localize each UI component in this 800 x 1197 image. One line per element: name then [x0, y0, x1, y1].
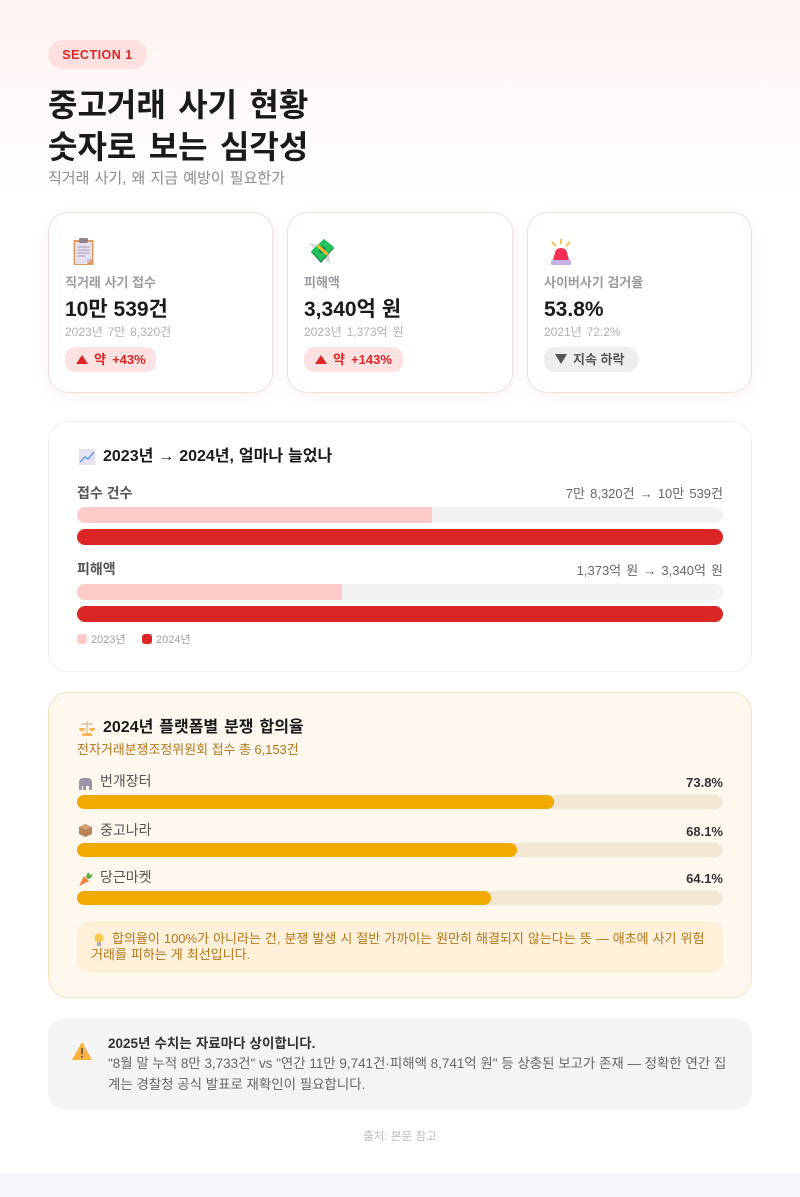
icon: carrot [79, 872, 93, 886]
warning body: "8월 말 누적 8만 3,733건" vs "연간 11만 9,741건·피해액 8,741억 원" 등 상충된 보고가 존재 — 정확한 연간 집 [108, 1056, 726, 1071]
bar: bungaejangteo [77, 795, 723, 809]
warning body: 계는 경찰청 공식 발표로 재확인이 필요합니다. [108, 1077, 365, 1092]
bar: reports 2023 [77, 507, 723, 523]
change pill [304, 347, 403, 372]
title: 중고거래 사기 현황 [48, 87, 308, 123]
platform label: 중고나라 [100, 822, 152, 838]
platform value: 64.1% [686, 871, 723, 886]
row values: damages: 1,373억 원 → 3,340억 원 [577, 563, 723, 578]
value: 3,340억 원 [304, 298, 401, 321]
previous year: 2023년 7만 8,320건 [65, 325, 171, 339]
icon: light bulb [94, 934, 104, 946]
note text: 거래를 피하는 게 최선입니다. [91, 947, 250, 962]
bar: damages 2024 [77, 606, 723, 622]
icon: warning [72, 1042, 92, 1060]
row label: damages: 피해액 [77, 561, 116, 577]
row label: reports: 접수 건수 [77, 485, 132, 501]
bar: damages 2023 [77, 584, 723, 600]
callout: settlement note [77, 921, 723, 973]
warning body [108, 1056, 726, 1092]
note text: 합의율이 100%가 아니라는 건, 분쟁 발생 시 절반 가까이는 원만히 해결되지 않는다는 뜻 — 애초에 사기 위험 [112, 931, 704, 946]
legend [77, 634, 191, 646]
trend pill [544, 347, 638, 372]
trend pill: 지속 하락 [573, 352, 624, 367]
panel: card reports [48, 212, 273, 393]
section badge [48, 40, 147, 69]
platform label: 당근마켓 [100, 869, 152, 885]
legend text 2023: 2023년 [91, 634, 126, 646]
icon: clipboard [74, 238, 94, 265]
value: 10만 539건 [65, 298, 168, 321]
subheading: 전자거래분쟁조정위원회 접수 총 6,153건 [77, 742, 299, 757]
row values: reports: 7만 8,320건 → 10만 539건 [566, 486, 723, 501]
subtitle: 직거래 사기, 왜 지금 예방이 필요한가 [48, 170, 285, 187]
icon: scales [79, 721, 95, 736]
note text [91, 931, 704, 962]
legend text 2024: 2024년 [156, 634, 191, 646]
label: 피해액 [304, 275, 340, 290]
bar: daangn [77, 891, 723, 905]
panel: card damages [287, 212, 513, 393]
icon: money with wings [309, 239, 334, 264]
heading: 2024년 플랫폼별 분쟁 합의율 [103, 719, 304, 736]
change pill [65, 347, 156, 372]
change pill: 약 +143% [333, 352, 392, 367]
previous year: 2023년 1,373억 원 [304, 325, 404, 339]
icon: elephant [79, 778, 92, 790]
icon: package [79, 824, 92, 837]
callout: 2025 figures warning [48, 1018, 752, 1110]
value: 53.8% [544, 298, 604, 321]
title: 숫자로 보는 심각성 [48, 129, 308, 165]
icon: siren [551, 239, 571, 265]
previous year: 2021년 72.2% [544, 325, 621, 339]
bar: reports 2024 [77, 529, 723, 545]
label: 사이버사기 검거율 [544, 275, 643, 290]
footer band [0, 1173, 800, 1197]
warning heading: 2025년 수치는 자료마다 상이합니다. [108, 1036, 315, 1051]
header background gradient [0, 0, 800, 200]
heading: 2023년 → 2024년, 얼마나 늘었나 [103, 448, 332, 465]
change pill: 약 +43% [94, 352, 146, 367]
label: 직거래 사기 접수 [65, 275, 156, 290]
panel: year-over-year comparison [48, 421, 752, 672]
panel: platform settlement [48, 692, 752, 998]
section badge: SECTION 1 [62, 48, 133, 62]
source: 출처: 본문 참고 [363, 1130, 437, 1143]
legend swatch 2023 [77, 634, 87, 644]
platform value: 68.1% [686, 824, 723, 839]
title [48, 87, 308, 165]
platform value: 73.8% [686, 775, 723, 790]
platform label: 번개장터 [100, 773, 152, 789]
legend swatch 2024 [142, 634, 152, 644]
icon: chart [79, 449, 95, 465]
panel: card clearance rate [527, 212, 752, 393]
bar: joonggonara [77, 843, 723, 857]
